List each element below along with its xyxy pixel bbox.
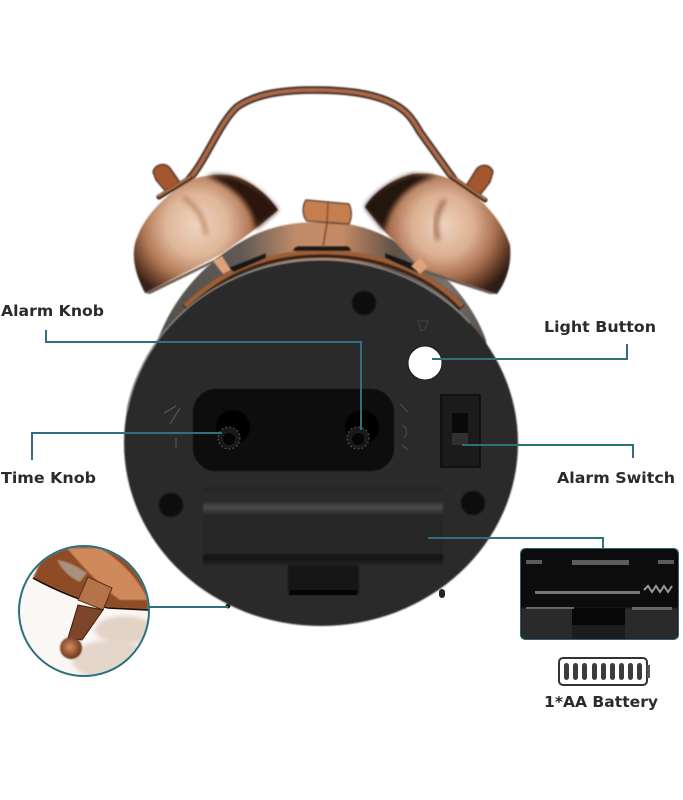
light button: [408, 346, 442, 380]
alarm knob: [345, 410, 379, 449]
clock: [124, 90, 518, 626]
top alarm hammer: [303, 200, 351, 247]
label: Light Button: Light Button: [544, 318, 656, 336]
light icon: [418, 321, 428, 330]
handle: [190, 90, 453, 178]
clock back face: [124, 260, 518, 626]
label: Alarm Knob: Alarm Knob: [1, 302, 104, 320]
time knob: [216, 410, 250, 449]
feet: [226, 589, 445, 608]
right bell: [365, 165, 510, 294]
knob recess: [164, 388, 408, 472]
left bell: [134, 165, 278, 294]
inset: battery compartment: [520, 548, 679, 640]
inset: copper foot close-up: [18, 545, 150, 677]
label: Alarm Switch: Alarm Switch: [557, 469, 675, 487]
right bell finial: [466, 165, 493, 195]
alarm switch: [441, 395, 480, 467]
clock body: [158, 222, 486, 420]
label: Time Knob: Time Knob: [1, 469, 96, 487]
screw holes: [159, 291, 485, 517]
battery cover: [203, 487, 443, 595]
left bell finial: [153, 165, 181, 193]
callout lines: [32, 330, 633, 607]
alarm clock back view infographic: [1, 85, 679, 710]
label: 1*AA Battery: 1*AA Battery: [544, 693, 658, 711]
icon: battery: [559, 658, 650, 685]
